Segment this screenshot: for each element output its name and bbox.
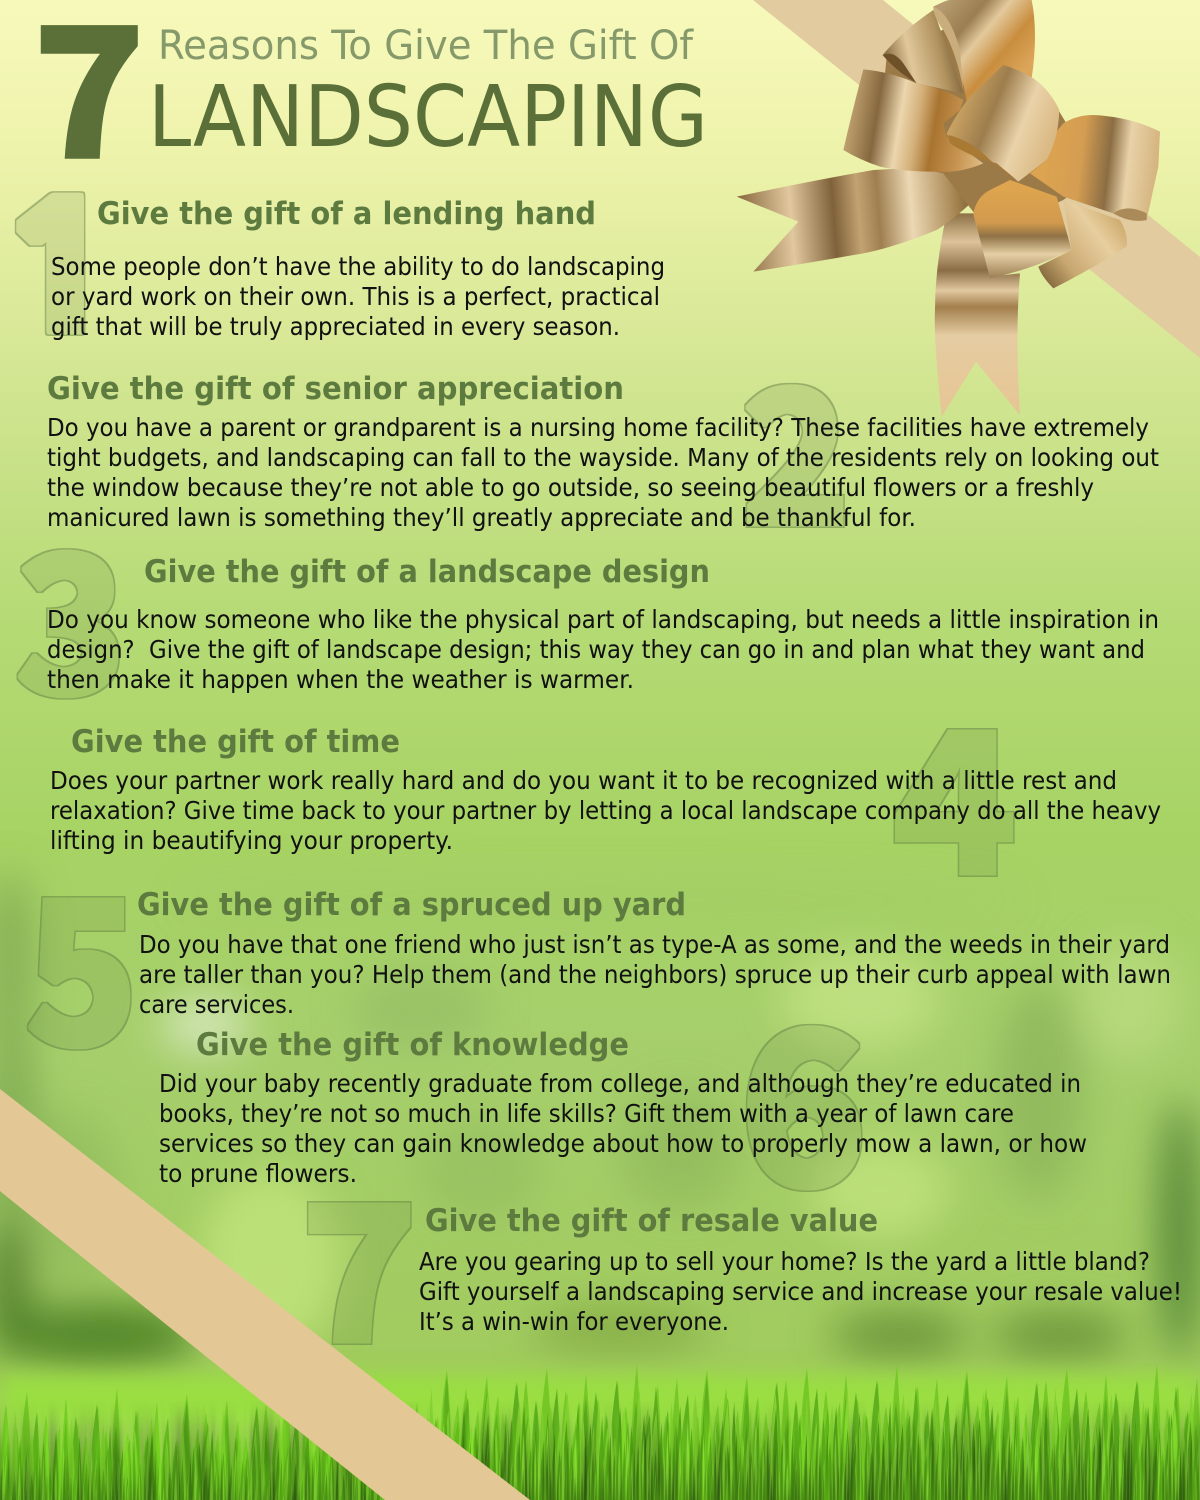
bow: bottom tail xyxy=(935,213,1020,417)
reason 4 xyxy=(50,724,1161,855)
big numerals: 6 xyxy=(739,937,868,1248)
ribbon: lower left diagonal xyxy=(0,1089,530,1500)
bow: left loop xyxy=(843,69,983,172)
body text: to prune flowers. xyxy=(159,1159,357,1188)
bow: centre backing xyxy=(877,20,1097,233)
body text: the window because they’re not able to go outside, so seeing beautiful flowers or a freshly xyxy=(47,473,1094,502)
bow: right loop xyxy=(1030,115,1160,221)
heading: Give the gift of knowledge xyxy=(196,1027,629,1063)
grass xyxy=(0,1365,1200,1500)
title xyxy=(32,0,708,211)
reason 2 xyxy=(47,371,1159,532)
bow: lower right back loop xyxy=(1038,200,1127,288)
big numerals: 3 xyxy=(15,470,127,750)
title line one: Reasons To Give The Gift Of xyxy=(158,23,694,69)
body text: care services. xyxy=(139,990,294,1019)
bow: lower front loop xyxy=(973,180,1072,278)
body text xyxy=(159,1069,1087,1188)
body text: lifting in beautifying your property. xyxy=(50,826,453,855)
heading: Give the gift of senior appreciation xyxy=(47,371,624,407)
body text xyxy=(419,1247,1182,1336)
body text: Does your partner work really hard and do you want it to be recognized with a little rest and xyxy=(50,766,1117,795)
body text: Do you have a parent or grandparent is a nursing home facility? These facilities have extremely xyxy=(47,413,1149,442)
body text xyxy=(47,605,1159,694)
body text: books, they’re not so much in life skills? Gift them with a year of lawn care xyxy=(159,1099,1014,1128)
bow: right loop inner xyxy=(1113,208,1147,221)
bow: left tail xyxy=(737,163,993,272)
body text xyxy=(47,413,1159,532)
bow: back top-left loop xyxy=(883,10,963,93)
heading: Give the gift of a spruced up yard xyxy=(137,887,686,923)
big numerals: 2 xyxy=(741,308,851,580)
reason 7 xyxy=(419,1203,1182,1336)
reason 6 xyxy=(159,1027,1087,1188)
body text: gift that will be truly appreciated in every season. xyxy=(51,312,620,341)
big numerals: 4 xyxy=(892,645,1017,931)
bow: centre loop inner xyxy=(948,135,1017,180)
body text: Are you gearing up to sell your home? Is the yard a little bland? xyxy=(419,1247,1150,1276)
big numerals xyxy=(0,184,1017,1397)
bow: centre loop xyxy=(947,65,1059,182)
body text: It’s a win-win for everyone. xyxy=(419,1307,729,1336)
reason 1 xyxy=(51,196,665,341)
body text: services so they can gain knowledge about how to properly mow a lawn, or how xyxy=(159,1129,1087,1158)
bow: back top-left inner shadow xyxy=(883,54,917,83)
big numerals: 5 xyxy=(25,812,139,1103)
bright grass haze xyxy=(0,1374,1200,1424)
heading: Give the gift of resale value xyxy=(425,1203,878,1239)
heading: Give the gift of a landscape design xyxy=(144,554,710,590)
body text: Do you know someone who like the physical part of landscaping, but needs a little inspiration in xyxy=(47,605,1159,634)
heading: Give the gift of a lending hand xyxy=(97,196,596,232)
blurred garden backdrop xyxy=(0,870,1200,1367)
bow: top loop inner xyxy=(933,7,963,90)
icon: gold bow xyxy=(737,0,1160,417)
body text: Did your baby recently graduate from college, and although they’re educated in xyxy=(159,1069,1081,1098)
bow: top loop xyxy=(933,0,1035,102)
heading: Give the gift of time xyxy=(71,724,400,760)
title line two: LANDSCAPING xyxy=(148,68,708,167)
reason 5 xyxy=(137,887,1171,1019)
big numerals: 1 xyxy=(0,184,122,354)
body text: Some people don’t have the ability to do landscaping xyxy=(51,252,665,281)
body text: design? Give the gift of landscape design; this way they can go in and plan what they want and xyxy=(47,635,1145,664)
body text xyxy=(139,930,1171,1019)
ribbon: upper right diagonal xyxy=(753,0,1200,358)
reason 3 xyxy=(47,554,1159,694)
big numerals: 7 xyxy=(300,1122,418,1397)
body text xyxy=(50,766,1161,855)
body text: or yard work on their own. This is a perfect, practical xyxy=(51,282,660,311)
body text: tight budgets, and landscaping can fall to the wayside. Many of the residents rely on looking out xyxy=(47,443,1159,472)
body text: manicured lawn is something they’ll greatly appreciate and be thankful for. xyxy=(47,503,916,532)
body text: then make it happen when the weather is warmer. xyxy=(47,665,634,694)
body text xyxy=(51,252,665,341)
